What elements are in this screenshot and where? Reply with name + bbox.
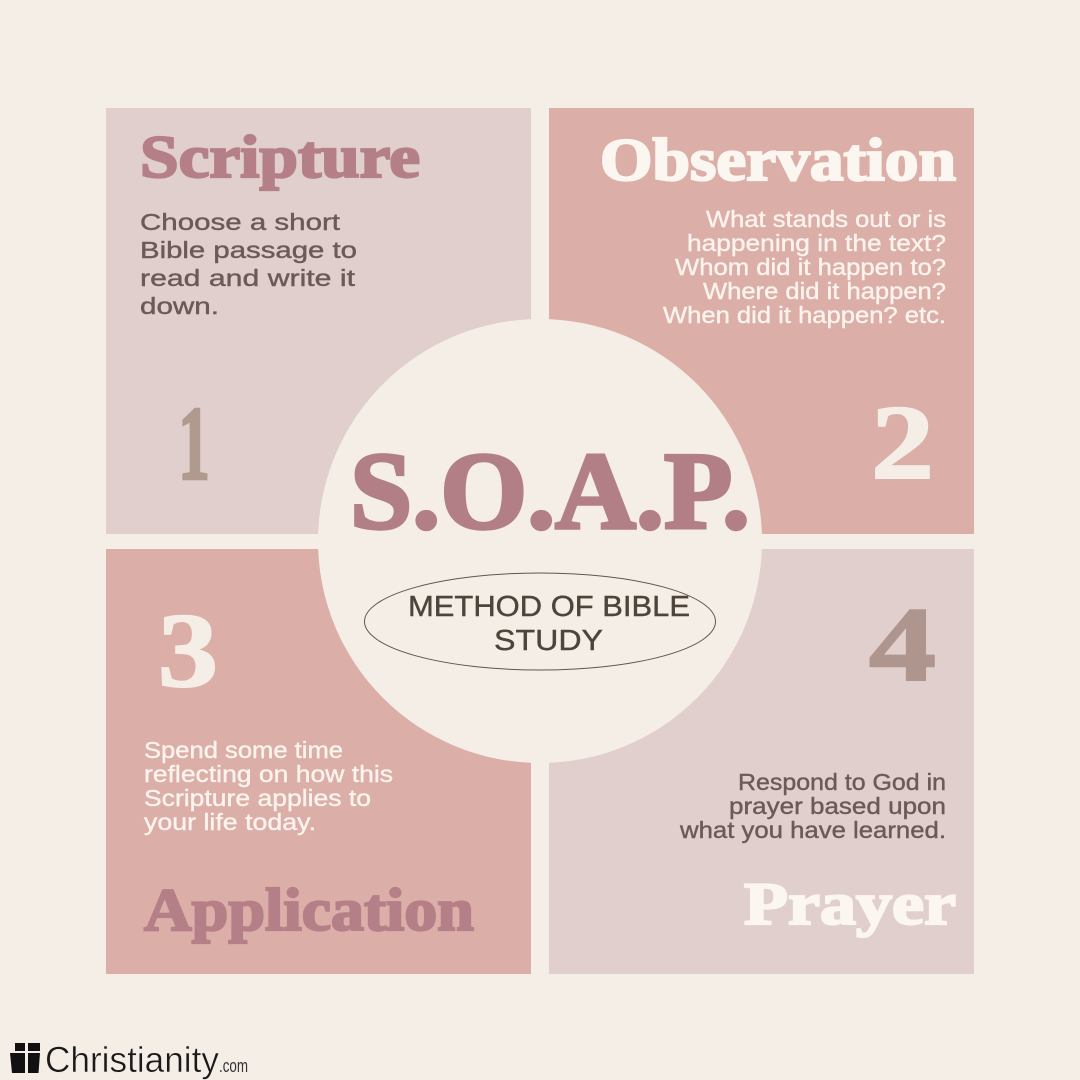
text: scripture description <box>140 209 357 319</box>
center circle <box>318 319 762 763</box>
number 1: 1 <box>178 385 210 502</box>
text: application description: reflecting on how this <box>144 761 393 787</box>
text: scripture description: Bible passage to <box>140 237 357 263</box>
text: application description: your life today. <box>144 809 316 835</box>
text: observation description: Where did it happen? <box>703 278 946 304</box>
logo: Christianity.com <box>10 1039 248 1080</box>
number 3: 3 <box>158 592 218 709</box>
number 2: 2 <box>871 384 934 501</box>
panel: observation <box>549 108 974 534</box>
subtitle badge <box>364 573 716 670</box>
subtitle text: METHOD OF BIBLE <box>408 591 690 623</box>
title: S.O.A.P.: S.O.A.P. <box>350 430 750 552</box>
logo: Christianity.com: .com <box>219 1056 248 1076</box>
text: prayer description: Respond to God in <box>738 769 946 795</box>
panel: prayer <box>549 549 974 974</box>
text: observation description: What stands out or is <box>706 206 946 232</box>
subtitle text <box>408 591 690 657</box>
text: scripture description: read and write it <box>140 265 356 291</box>
text: scripture description: Choose a short <box>140 209 341 235</box>
text: application description <box>144 737 393 835</box>
text: application description: Scripture applies to <box>144 785 371 811</box>
text: observation description: Whom did it happen to? <box>675 254 946 280</box>
panel: scripture <box>106 108 531 534</box>
text: prayer description: prayer based upon <box>729 793 946 819</box>
text: prayer description: what you have learned. <box>679 817 946 843</box>
heading: Observation: Observation <box>600 127 956 193</box>
text: application description: Spend some time <box>144 737 343 763</box>
heading: Scripture: Scripture <box>140 124 420 190</box>
subtitle text: STUDY <box>494 625 603 657</box>
text: observation description <box>663 206 946 328</box>
text: observation description: When did it happen? etc. <box>663 302 946 328</box>
wordmark: Christianity <box>45 1039 219 1080</box>
heading: Application: Application <box>144 877 474 943</box>
text: prayer description <box>679 769 946 843</box>
number 4: 4 <box>869 586 936 703</box>
text: scripture description: down. <box>140 293 219 319</box>
heading: Prayer: Prayer <box>744 871 956 937</box>
icon: cross <box>10 1043 40 1073</box>
panel: application <box>106 549 531 974</box>
text: observation description: happening in the text? <box>687 230 946 256</box>
